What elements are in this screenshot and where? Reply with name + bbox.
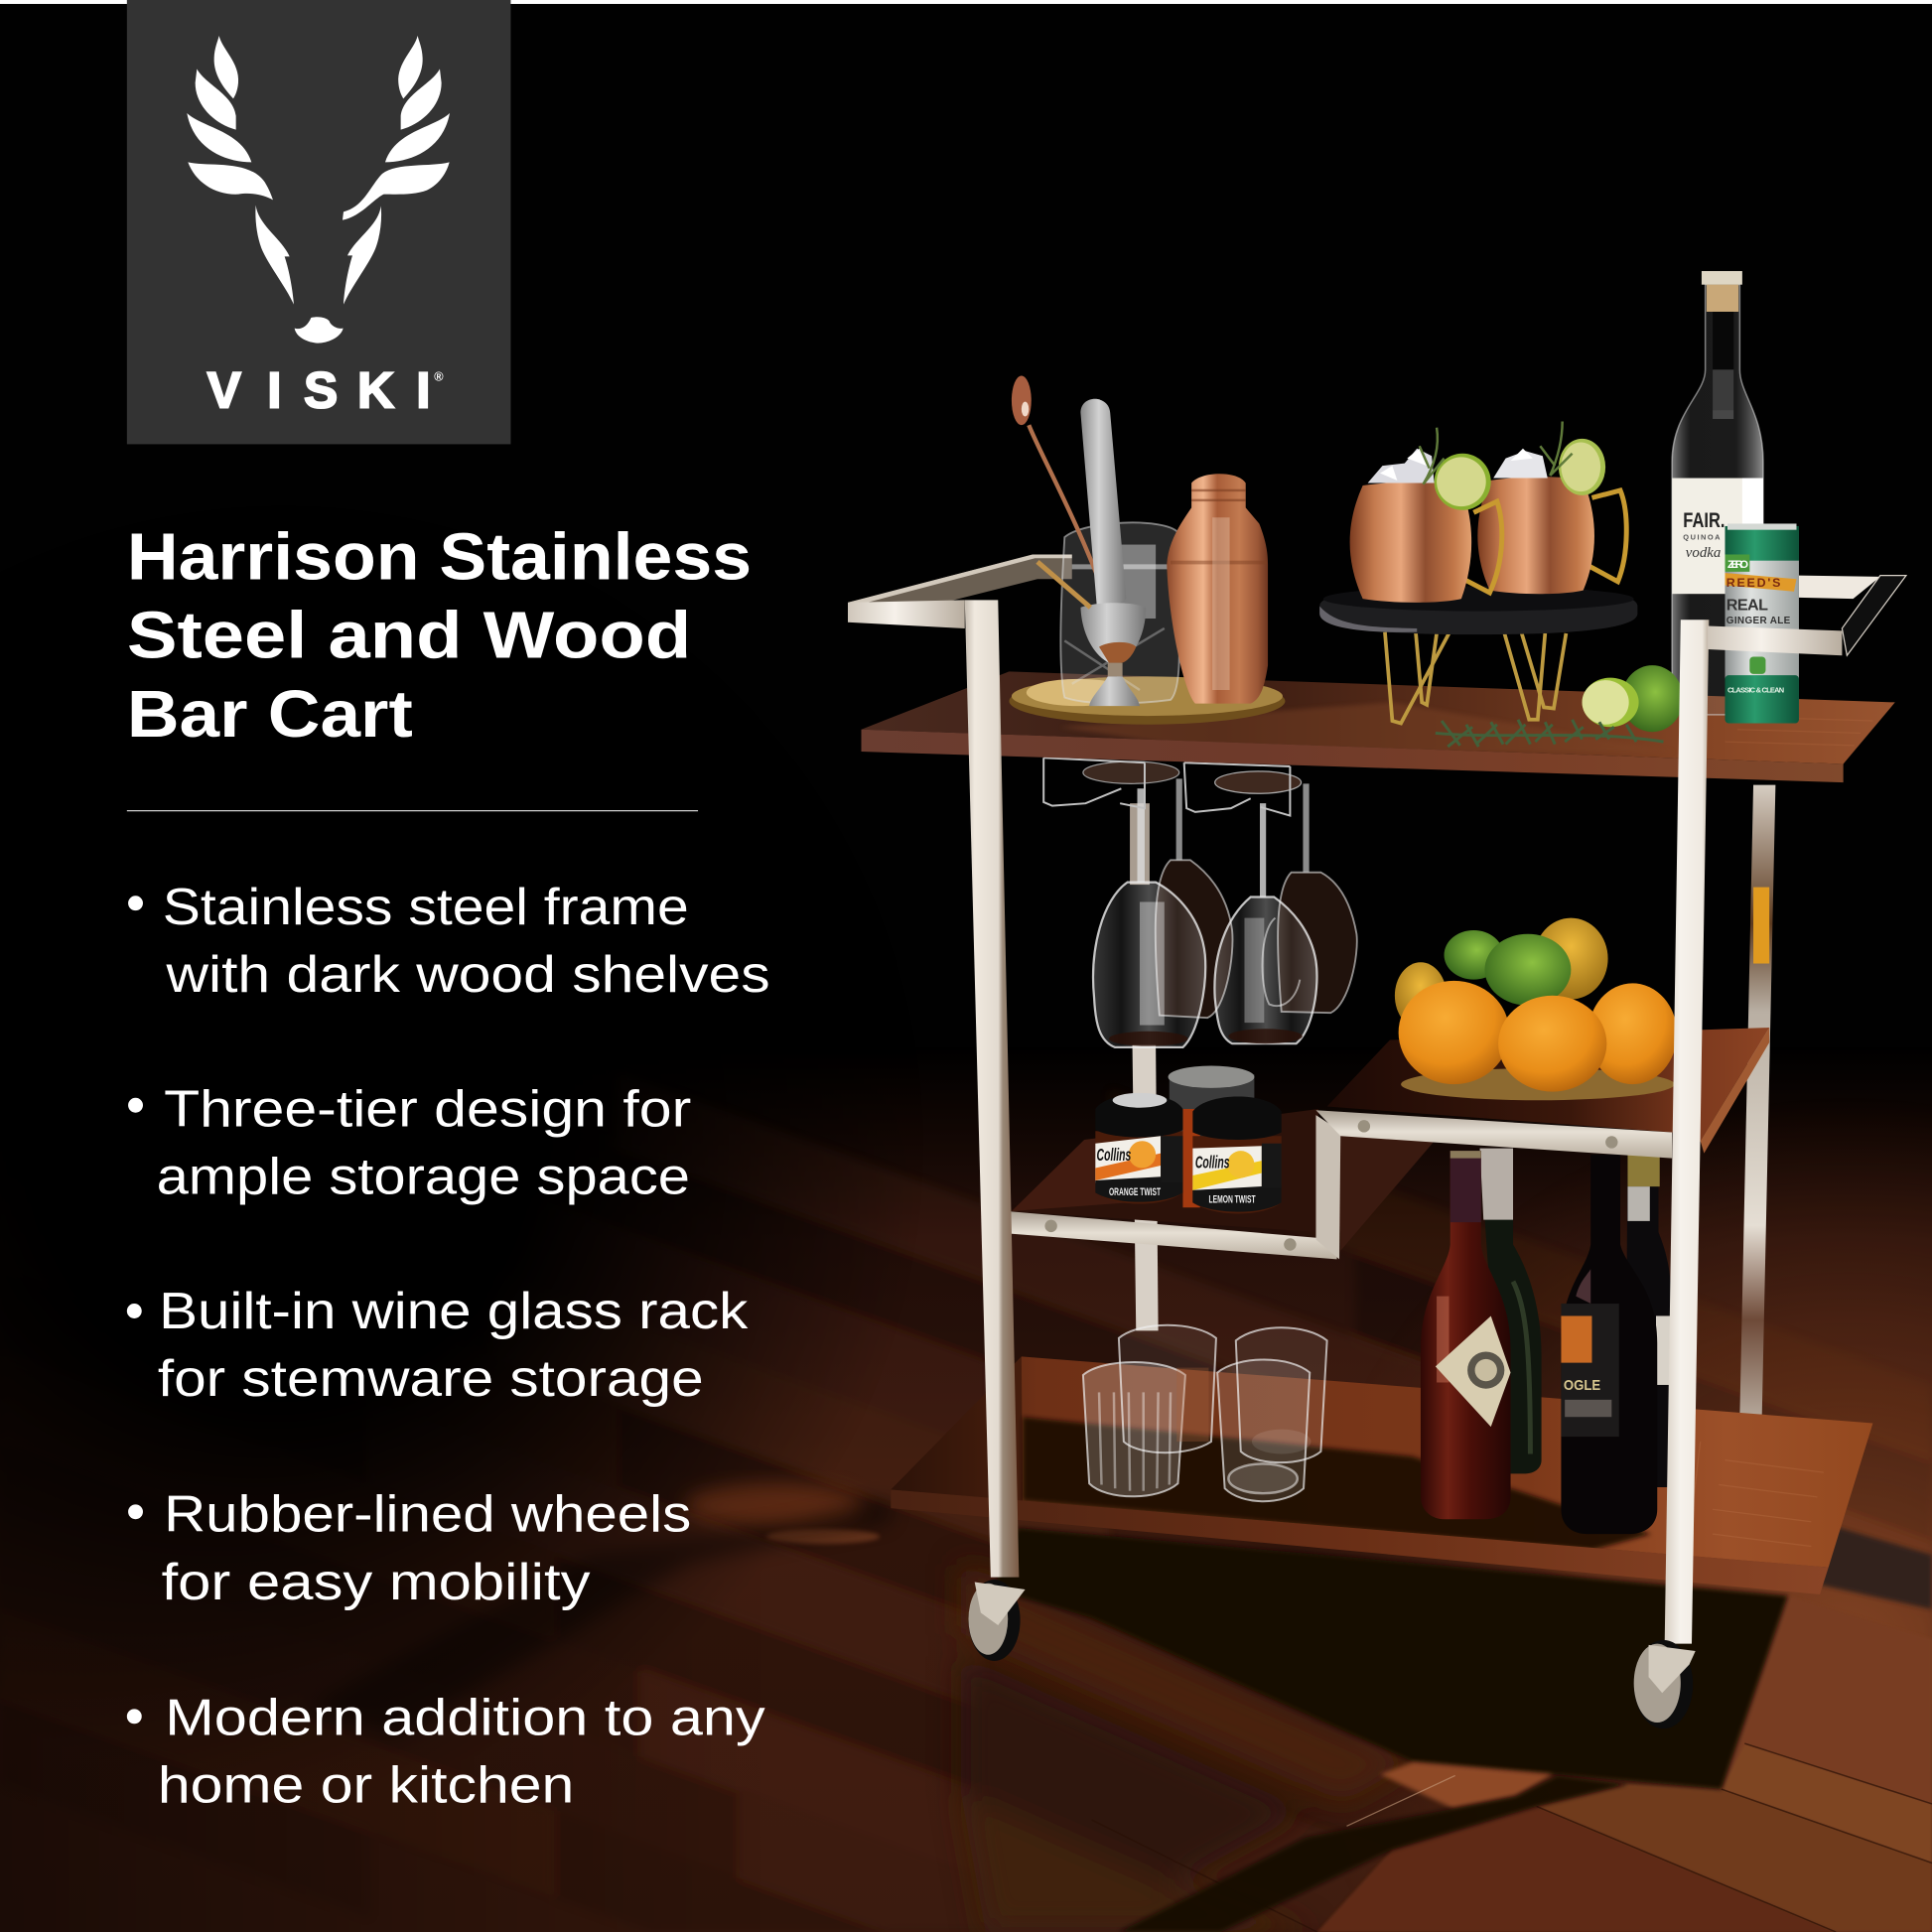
mug right [1477, 421, 1626, 594]
fruit plate [1395, 918, 1677, 1100]
jigger [1037, 562, 1146, 706]
front metal bar [1007, 1211, 1337, 1259]
bullet 4: for easy mobility [162, 1554, 590, 1611]
front left post [965, 600, 1019, 1578]
glass front left [1093, 788, 1205, 1047]
ginger ale can: CLASSIC & CLEAN [1727, 685, 1784, 694]
lemon twist jar [1192, 1097, 1282, 1213]
wine label: OGLE [1564, 1378, 1600, 1394]
lemons and limes [1395, 918, 1608, 1029]
bullet 1 [128, 879, 770, 1004]
bullet 5: home or kitchen [158, 1757, 574, 1815]
shelf shadow [1023, 1417, 1651, 1550]
wine label [1561, 1304, 1619, 1437]
brass tray [1009, 676, 1285, 725]
left handle front [848, 600, 965, 628]
vodka label: QUINOA [1683, 533, 1721, 542]
logo wordmark: VISKI [207, 362, 431, 419]
champagne bottle [1480, 1149, 1542, 1473]
title: Bar Cart [127, 677, 413, 752]
ginger ale can [1725, 523, 1799, 724]
title: Steel and Wood [127, 599, 691, 673]
orange twist jar: Collins [1097, 1145, 1132, 1165]
right handle side [1708, 576, 1906, 655]
vertical metal bar [1315, 1115, 1340, 1259]
bullet 4: Rubber-lined wheels [164, 1486, 691, 1544]
orange twist jar: ORANGE TWIST [1109, 1186, 1161, 1198]
light patch on floor left of cart [685, 1483, 863, 1528]
back handle bar right [1799, 576, 1880, 599]
registered mark: ® [434, 369, 444, 383]
bottles [1421, 1149, 1671, 1534]
bullet 3: Built-in wine glass rack [159, 1283, 749, 1340]
marble stand [1319, 587, 1637, 634]
ginger ale can: GINGER ALE [1726, 616, 1791, 626]
bar cart photo [848, 271, 1906, 1728]
lemon twist jar: Collins [1195, 1153, 1230, 1173]
rose wine bottle [1421, 1151, 1511, 1519]
orange twist jar [1095, 1093, 1182, 1204]
plank seam highlight [1346, 1775, 1455, 1826]
bullet 1: with dark wood shelves [165, 946, 770, 1004]
cart shadow on floor [993, 1528, 1788, 1789]
jars [1095, 1066, 1282, 1213]
title divider [127, 810, 698, 811]
mug left [1350, 428, 1502, 603]
soft planks below cart, left side [961, 1563, 1414, 1932]
plank seams right [1092, 1743, 1932, 1932]
diamond label [1436, 1315, 1511, 1427]
copper mugs [1350, 421, 1626, 603]
bar spoon [1012, 376, 1108, 604]
bullet 2: ample storage space [157, 1149, 690, 1206]
muddler [1080, 399, 1126, 607]
copper shaker [1167, 474, 1268, 704]
ice right [1493, 449, 1548, 479]
ginger ale can: ZERO [1727, 559, 1748, 571]
glass back left [1156, 860, 1357, 1018]
oranges [1399, 981, 1677, 1092]
vodka bottle [1672, 271, 1763, 715]
bullet 1: Stainless steel frame [163, 879, 689, 936]
feature list [127, 879, 770, 1815]
mixing glass [1060, 522, 1179, 703]
wine glass rack and glasses [1043, 758, 1357, 1047]
lit planks at right [1317, 1595, 1932, 1932]
lemon twist jar: LEMON TWIST [1208, 1193, 1256, 1205]
port bottle [1625, 1155, 1671, 1487]
bullet 4 [128, 1486, 691, 1611]
wire rack [1043, 758, 1290, 816]
bullet 2 [128, 1080, 691, 1206]
glass front right [1214, 803, 1317, 1043]
bullet 2: Three-tier design for [164, 1080, 691, 1138]
diagonal bar shadow [1119, 1775, 1627, 1932]
tin [1169, 1066, 1254, 1207]
vodka label: FAIR. [1683, 509, 1725, 532]
rosemary sprig [1436, 720, 1663, 747]
bullet 5: Modern addition to any [165, 1689, 765, 1746]
dark plank at right edge [1819, 1525, 1932, 1609]
ice left [1368, 449, 1435, 483]
front right post [1665, 620, 1709, 1644]
wood floor [0, 505, 1932, 1932]
back handle bar left [848, 554, 1072, 604]
stems back [1179, 778, 1307, 873]
floor shadow left bar [308, 1498, 893, 1737]
top white strip [0, 0, 1932, 4]
bullet 3 [127, 1283, 749, 1408]
limes on shelf [1583, 665, 1683, 732]
vodka label [1672, 479, 1763, 594]
bottom shelf [891, 1356, 1872, 1594]
vodka label: vodka [1686, 545, 1721, 561]
lit floor patch under cart [1380, 1762, 1553, 1809]
middle left shelf [1007, 1109, 1436, 1259]
red wine bottle [1561, 1155, 1657, 1534]
logo mark: stag head [187, 36, 450, 419]
jigger arm [1037, 562, 1090, 608]
ginger ale can: REED'S [1726, 576, 1780, 590]
right wheel [1634, 1640, 1696, 1728]
back posts [1130, 785, 1775, 1415]
title [127, 519, 752, 752]
tumbler glasses [1083, 1325, 1327, 1501]
title: Harrison Stainless [127, 519, 752, 594]
top shelf [862, 671, 1895, 782]
logo panel [127, 0, 510, 444]
hairpin stand legs [1385, 632, 1566, 724]
bullet 5 [127, 1689, 765, 1815]
middle right shelf [1315, 1028, 1769, 1159]
ginger ale can: REAL [1726, 596, 1768, 614]
bullet 3: for stemware storage [158, 1350, 704, 1408]
inverted glass feet [1083, 761, 1179, 783]
left wheel [968, 1580, 1026, 1661]
